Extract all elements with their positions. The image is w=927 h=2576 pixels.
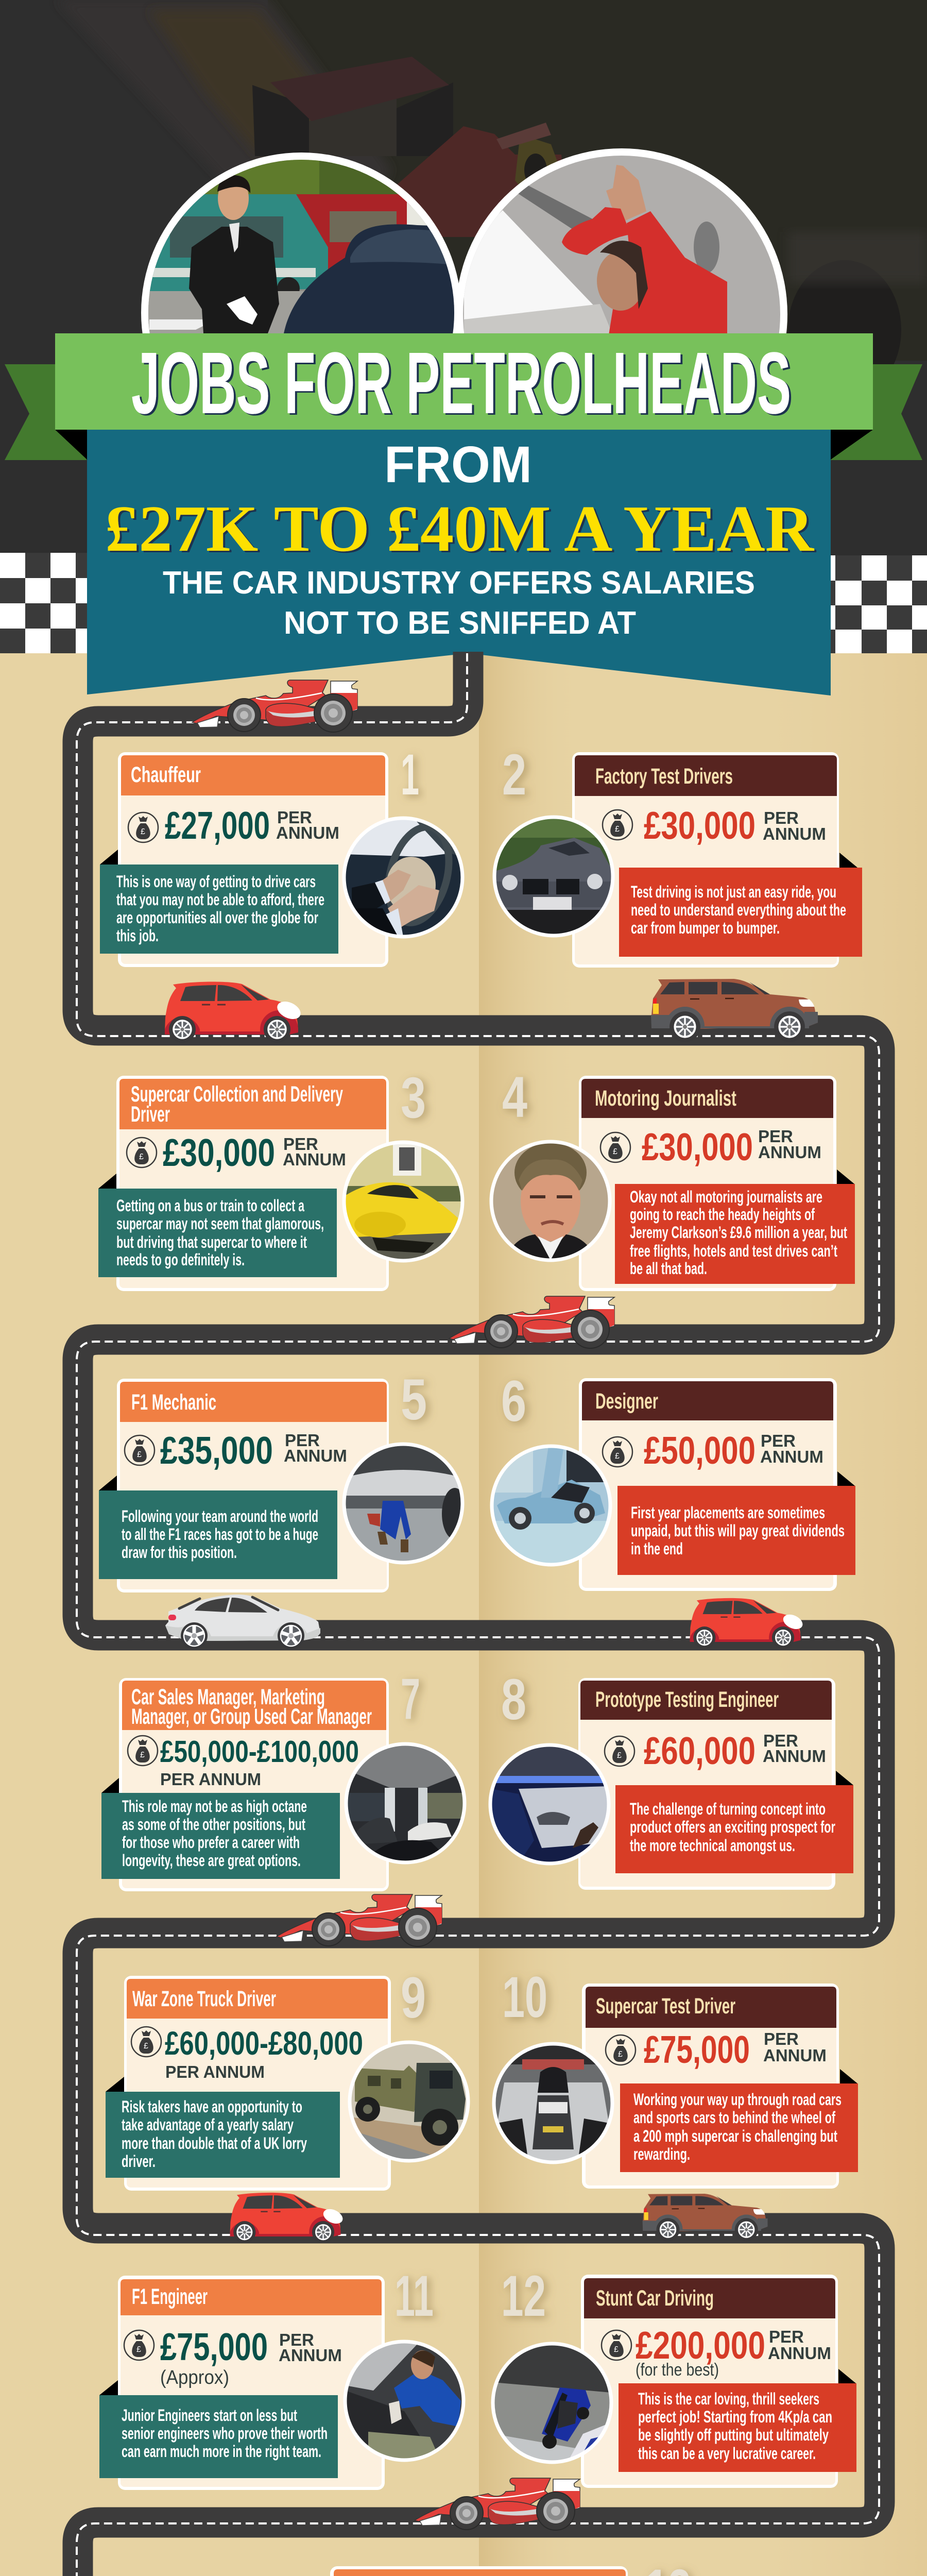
photo: stunt car on two wheels (493, 2344, 611, 2462)
panel: 4 Motoring Journalist (491, 1065, 855, 1291)
job title: Manager, or Group Used Car Manager (131, 1704, 372, 1729)
subtitle: salary range: £27K TO £40M A YEAR (105, 492, 815, 565)
icon: money bag: £ (617, 1751, 622, 1760)
photo: Jeremy Clarkson (491, 1142, 610, 1260)
photo: blue concept car (492, 1446, 610, 1565)
description: This is one way of getting to drive cars (116, 872, 316, 891)
icon: money bag (606, 2035, 636, 2065)
per annum: ANNUM (763, 824, 826, 843)
description: be all that bad. (630, 1259, 707, 1278)
qualifier: (Approx) (160, 2367, 229, 2388)
description: free flights, hotels and test drives can’t (630, 1242, 837, 1260)
salary: £200,000 (636, 2324, 765, 2367)
job title: Driver (131, 1102, 170, 1127)
per annum: ANNUM (283, 1150, 346, 1169)
photo: engineer at engine bay (345, 2342, 464, 2460)
description (620, 2069, 858, 2172)
item number: 2 (502, 742, 526, 807)
per annum: ANNUM (279, 2346, 342, 2365)
icon: F1 car 4 (415, 2478, 580, 2530)
description: Junior Engineers start on less but (122, 2406, 297, 2425)
icon: money bag (128, 1736, 158, 1766)
description: be slightly off putting but ultimately (638, 2426, 829, 2444)
description: this can be a very lucrative career. (638, 2444, 816, 2463)
card body (119, 1678, 389, 1891)
description: this job. (116, 926, 159, 945)
description: longevity, these are great options. (122, 1851, 301, 1870)
subtitle: from: FROM (384, 436, 532, 494)
salary: £30,000 (163, 1131, 275, 1174)
panel: 5 F1 Mechanic (99, 1367, 468, 1592)
description (98, 1174, 337, 1277)
item number: 8 (501, 1667, 526, 1732)
icon: money bag (124, 2330, 154, 2360)
job title: F1 Mechanic (131, 1390, 216, 1415)
description (101, 1778, 340, 1879)
card body (581, 2275, 838, 2488)
per annum: PER (764, 2029, 799, 2048)
description: but driving that supercar to where it (116, 1233, 307, 1251)
description: and sports cars to behind the wheel of (633, 2108, 835, 2127)
road (78, 652, 880, 2576)
checkered flag: left (0, 553, 87, 653)
item number: 11 (394, 2264, 434, 2328)
job title: War Zone Truck Driver (132, 1987, 276, 2011)
description: in the end (631, 1539, 683, 1558)
description (99, 1476, 337, 1579)
subtitle: line one: THE CAR INDUSTRY OFFERS SALARIES (163, 565, 755, 601)
description: product offers an exciting prospect for (630, 1818, 835, 1836)
description: a 200 mph supercar is challenging but (633, 2127, 837, 2145)
description (100, 850, 338, 954)
description (106, 2077, 340, 2178)
per annum: PER (763, 1731, 798, 1750)
tan page background (0, 653, 927, 2576)
description: needs to go definitely is. (116, 1250, 245, 1269)
description: perfect job! Starting from 4Kp/a can (638, 2408, 832, 2426)
description (619, 2369, 856, 2472)
photo: hands on steering wheel (344, 818, 462, 937)
job title: Chauffeur (131, 762, 201, 787)
subtitle: line two: NOT TO BE SNIFFED AT (284, 605, 636, 641)
description: more than double that of a UK lorry (122, 2134, 307, 2153)
icon: brown SUV 1 (651, 979, 818, 1042)
photo: mechanic under a car (344, 1444, 468, 1563)
job title: Prototype Testing Engineer (595, 1687, 779, 1712)
per annum: ANNUM (760, 1447, 823, 1466)
panel: 6 Designer (492, 1369, 855, 1591)
card body (578, 1678, 835, 1890)
description: the more technical amongst us. (630, 1836, 795, 1855)
panel: 12 Stunt Car Driving (493, 2264, 856, 2488)
job title: Car Sales Manager, Marketing (131, 1685, 325, 1709)
job title: Supercar Collection and Delivery (131, 1082, 343, 1107)
salary: £75,000 (160, 2325, 268, 2368)
item number: 1 (401, 742, 419, 807)
salary: £27,000 (165, 804, 270, 847)
icon: money bag (125, 1435, 154, 1465)
description: This is the car loving, thrill seekers (638, 2389, 819, 2408)
icon: money bag (128, 812, 158, 842)
card body (118, 2276, 385, 2490)
salary: £50,000-£100,000 (160, 1735, 359, 1769)
icon: brown SUV 2 (643, 2194, 767, 2241)
icon: red car 1 (165, 982, 303, 1043)
per annum: PER (283, 1134, 318, 1154)
card body (124, 1976, 391, 2191)
item number: 5 (401, 1367, 427, 1432)
item number: 7 (401, 1667, 420, 1731)
salary: £60,000-£80,000 (165, 2025, 363, 2062)
description: supercar may not seem that glamorous, (116, 1214, 324, 1233)
icon: money bag: £ (141, 827, 145, 836)
salary: £30,000 (644, 804, 756, 847)
description (615, 1170, 855, 1284)
salary: £60,000 (644, 1729, 756, 1772)
per annum: ANNUM (763, 1747, 826, 1766)
panel: 8 Prototype Testing Engineer (490, 1667, 853, 1890)
description: that you may not be able to afford, there (116, 890, 324, 909)
card body (579, 1378, 837, 1591)
photo: yellow supercar (344, 1142, 462, 1261)
banner: green title ribbon (55, 333, 873, 430)
item number: 3 (401, 1065, 426, 1130)
card body (117, 1379, 389, 1592)
icon: money bag (127, 1138, 157, 1167)
card body (118, 752, 388, 967)
per annum: ANNUM (276, 823, 339, 842)
description: are opportunities all over the globe for (116, 908, 318, 927)
per annum: PER ANNUM (160, 1770, 261, 1789)
icon: white sedan (165, 1595, 320, 1649)
icon: red car 2 (690, 1598, 805, 1649)
description (99, 2380, 338, 2478)
salary: £30,000 (642, 1125, 753, 1168)
ribbon tails and folds (5, 364, 922, 460)
icon: money bag: £ (144, 2042, 148, 2050)
salary: £50,000 (644, 1429, 756, 1472)
photo: car showroom (346, 1744, 465, 1862)
item number: 4 (502, 1065, 527, 1129)
description: for those who prefer a career with (122, 1833, 300, 1852)
job title: Motoring Journalist (595, 1086, 736, 1111)
description: car from bumper to bumper. (631, 919, 780, 937)
description: rewarding. (633, 2145, 690, 2163)
photo: racing driver waving (458, 148, 787, 333)
salary: £35,000 (160, 1429, 273, 1472)
icon: money bag (602, 2330, 631, 2360)
icon: F1 car top (192, 680, 357, 732)
job title: Stunt Car Driving (596, 2286, 714, 2311)
card body (579, 1076, 836, 1291)
description (617, 1471, 855, 1575)
per annum: PER (279, 2330, 314, 2349)
description: as some of the other positions, but (122, 1815, 305, 1834)
job title: Supercar Test Driver (596, 1994, 735, 2019)
item number: 10 (502, 1965, 547, 2029)
icon: money bag: £ (618, 2050, 623, 2059)
qualifier: (for the best) (636, 2360, 719, 2380)
icon: money bag (603, 810, 632, 840)
description (619, 853, 862, 957)
panel: 10 Supercar Test Driver (494, 1965, 858, 2189)
photo: chauffeur beside car (141, 152, 459, 333)
salary: £75,000 (644, 2028, 750, 2071)
icon: money bag: £ (614, 2345, 619, 2354)
description: take advantage of a yearly salary (122, 2115, 294, 2134)
panel: 2 Factory Test Drivers (494, 742, 862, 968)
item number: 12 (501, 2264, 546, 2328)
icon: F1 car 2 (449, 1296, 614, 1348)
description: Getting on a bus or train to collect a (116, 1196, 304, 1215)
per annum: PER (769, 2327, 804, 2346)
panel: 3 Supercar Collection and Delivery Driver (98, 1065, 462, 1291)
photo: grey BMW (494, 817, 613, 936)
description: This role may not be as high octane (122, 1797, 307, 1816)
description: to all the F1 races has got to be a huge (122, 1525, 318, 1544)
card body (572, 752, 839, 968)
per annum: ANNUM (284, 1446, 347, 1465)
icon: money bag: £ (136, 2345, 141, 2354)
card body (582, 1984, 839, 2189)
per annum: PER (761, 1431, 796, 1450)
icon: money bag: £ (137, 1450, 142, 1459)
photo: designer drawing on tablet (490, 1745, 609, 1863)
per annum: PER (758, 1127, 793, 1146)
job title: Factory Test Drivers (595, 764, 733, 789)
icon: money bag: £ (139, 1153, 144, 1161)
per annum: ANNUM (763, 2046, 827, 2065)
description: Risk takers have an opportunity to (122, 2097, 302, 2116)
description: can earn much more in the right team. (122, 2442, 321, 2461)
item number: 6 (501, 1369, 526, 1433)
per annum: ANNUM (768, 2344, 831, 2363)
icon: money bag (131, 2027, 161, 2057)
card body (330, 2566, 628, 2576)
icon: money bag: £ (613, 1147, 617, 1156)
description: draw for this position. (122, 1543, 237, 1562)
panel: 13 F1 Driver (313, 2557, 725, 2576)
icon: F1 car 3 (277, 1894, 442, 1946)
description: going to reach the heady heights of (630, 1205, 815, 1224)
per annum: PER (285, 1431, 320, 1450)
icon: money bag (600, 1132, 630, 1162)
icon: money bag (605, 1736, 634, 1766)
panel: 7 Car Sales Manager, Marketing Manager, or Group Used Car Manager (101, 1667, 465, 1891)
description: Following your team around the world (122, 1507, 318, 1526)
panel: 11 F1 Engineer (99, 2264, 464, 2490)
panel: 9 War Zone Truck Driver (106, 1965, 468, 2191)
banner: teal subtitle panel (87, 430, 831, 696)
description (615, 1771, 853, 1873)
icon: money bag (603, 1437, 632, 1467)
photo: military truck (350, 2042, 468, 2161)
per annum: ANNUM (758, 1143, 821, 1162)
description: senior engineers who prove their worth (122, 2424, 328, 2443)
panel: 1 Chauffeur (100, 742, 462, 967)
per annum: PER ANNUM (165, 2062, 265, 2081)
description: First year placements are sometimes (631, 1503, 825, 1522)
icon: money bag: £ (615, 825, 620, 834)
checkered flag: right (831, 555, 927, 653)
dark hero background with faint F1 car (0, 0, 927, 653)
icon: money bag: £ (615, 1452, 620, 1461)
icon: red car 3 (230, 2193, 345, 2243)
card body (116, 1076, 389, 1291)
icon: money bag: £ (140, 1751, 145, 1759)
job title: Designer (595, 1389, 658, 1414)
photo: single-seater racer (494, 2044, 612, 2162)
description: Okay not all motoring journalists are (630, 1188, 822, 1206)
description: driver. (122, 2152, 156, 2171)
per annum: PER (277, 808, 312, 827)
per annum: PER (764, 808, 799, 827)
description: The challenge of turning concept into (630, 1800, 826, 1818)
item number: 9 (401, 1965, 426, 2030)
job title: F1 Engineer (132, 2284, 208, 2309)
